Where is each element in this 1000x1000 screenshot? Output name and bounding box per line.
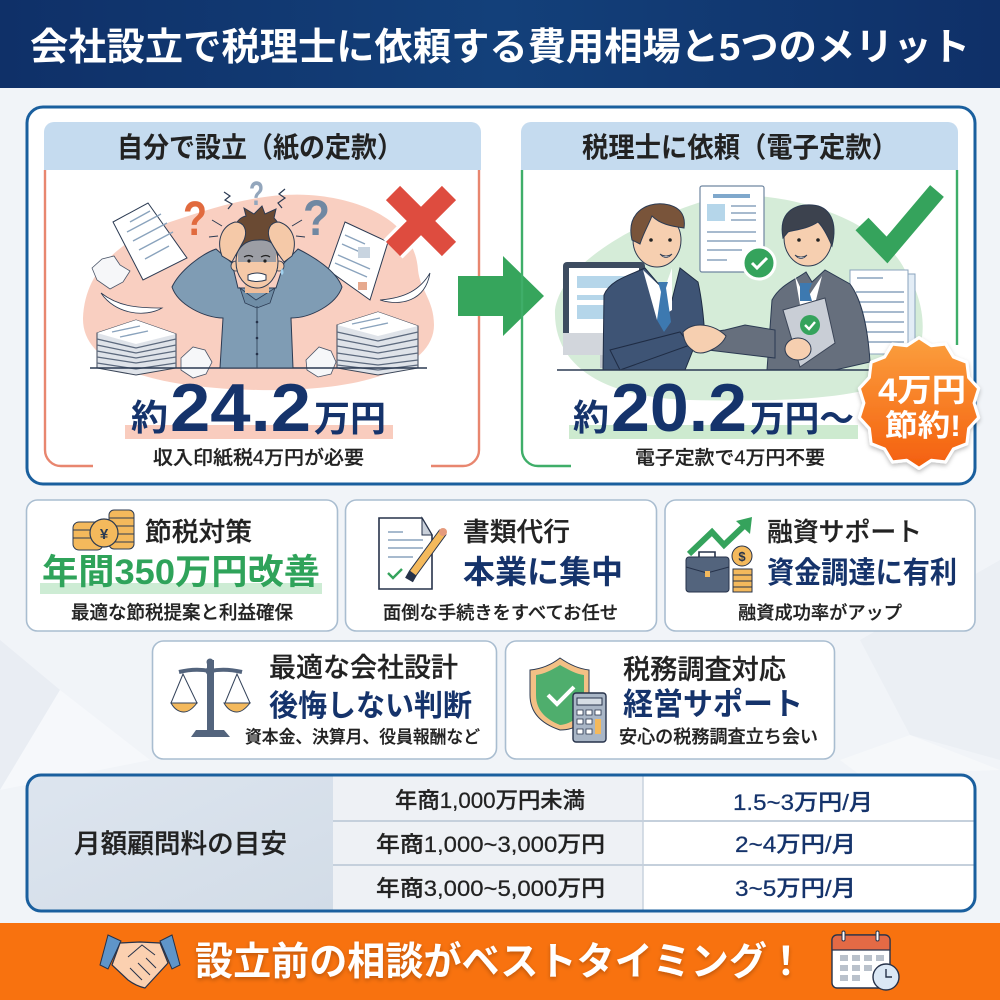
highlight: no regrets: 後悔しない判断 bbox=[269, 690, 472, 723]
caption: company design: 資本金、決算月、役員報酬など bbox=[245, 727, 480, 747]
table heading: 月額顧問料の目安 bbox=[74, 829, 287, 859]
highlight: management support: 経営サポート bbox=[623, 687, 803, 722]
card: tax saving bbox=[26, 500, 338, 631]
card: tax audit bbox=[506, 641, 834, 759]
table: monthly fee guide bbox=[27, 775, 975, 911]
heading: self setup: 自分で設立（紙の定款） bbox=[117, 132, 403, 163]
icon: coins: ¥ bbox=[100, 526, 109, 543]
illustration: stressed man with papers: ? bbox=[303, 190, 330, 246]
price: self setup: 約 bbox=[131, 397, 168, 438]
panel: self setup bbox=[44, 122, 481, 469]
card: paperwork bbox=[346, 500, 656, 631]
row: under 10M bbox=[395, 788, 873, 815]
icon: document and pencil bbox=[379, 518, 447, 589]
badge: 4万円節約 bbox=[859, 338, 979, 468]
icon: shield and calculator bbox=[530, 658, 606, 742]
heading: tax audit: 税務調査対応 bbox=[623, 655, 786, 685]
row: 10M to 30M: 年商1,000~3,000万円 bbox=[376, 832, 605, 857]
note: tax accountant: 電子定款で4万円不要 bbox=[635, 447, 825, 469]
heading: paperwork: 書類代行 bbox=[463, 517, 570, 547]
caption: tax saving: 最適な節税提案と利益確保 bbox=[71, 602, 293, 623]
icon: red cross bbox=[393, 193, 449, 249]
price: self setup: 万円 bbox=[314, 398, 386, 439]
badge: 4万円節約: 節約! bbox=[885, 410, 961, 443]
icon: growth and briefcase: $ bbox=[738, 549, 746, 564]
icon: growth and briefcase bbox=[686, 517, 752, 592]
caption: paperwork: 面倒な手続きをすべてお任せ bbox=[383, 603, 618, 623]
illustration: stressed man with papers: ? bbox=[249, 175, 264, 213]
row: 10M to 30M bbox=[376, 832, 856, 857]
title banner: 会社設立で税理士に依頼する費用相場と5つのメリット bbox=[30, 27, 970, 69]
panel: tax accountant bbox=[521, 122, 958, 469]
icon: handshake bbox=[100, 935, 180, 988]
caption: financing: 融資成功率がアップ bbox=[738, 602, 902, 623]
row: under 10M: 年商1,000万円未満 bbox=[395, 788, 585, 813]
heading: financing: 融資サポート bbox=[767, 517, 922, 547]
illustration: stressed man with papers bbox=[83, 175, 434, 390]
icon: calendar bbox=[832, 931, 899, 990]
icon: scales bbox=[171, 658, 250, 737]
title banner bbox=[0, 0, 1000, 88]
price: tax accountant: 万円〜 bbox=[750, 398, 854, 439]
price: tax accountant: 約 bbox=[573, 397, 609, 438]
card: financing bbox=[665, 500, 975, 631]
illustration: handshake bbox=[555, 186, 923, 401]
caption: tax audit: 安心の税務調査立ち会い bbox=[619, 727, 818, 747]
highlight: 350万円: 年間350万円改善 bbox=[42, 553, 320, 592]
icon: green check badge bbox=[743, 247, 775, 279]
heading: tax saving: 節税対策 bbox=[145, 517, 252, 547]
price: tax accountant bbox=[569, 370, 858, 446]
row: 30M to 50M: 3~5万円/月 bbox=[735, 876, 856, 901]
card: company design bbox=[152, 641, 496, 759]
price: tax accountant: 20.2 bbox=[611, 370, 747, 446]
heading: company design: 最適な会社設計 bbox=[269, 653, 458, 683]
icon: green check mark bbox=[862, 191, 937, 250]
footer banner bbox=[0, 923, 1000, 1000]
highlight: funding advantage: 資金調達に有利 bbox=[767, 557, 957, 590]
heading: tax accountant: 税理士に依頼（電子定款） bbox=[582, 132, 898, 163]
note: self setup: 収入印紙税4万円が必要 bbox=[153, 447, 364, 469]
price: self setup bbox=[125, 370, 393, 446]
price: self setup: 24.2 bbox=[170, 370, 311, 446]
illustration: stressed man with papers: ? bbox=[183, 193, 207, 246]
row: 10M to 30M: 2~4万円/月 bbox=[735, 832, 856, 857]
badge: 4万円節約: 4万円 bbox=[878, 372, 966, 408]
row: 30M to 50M bbox=[376, 876, 856, 901]
row: under 10M: 1.5~3万円/月 bbox=[733, 790, 873, 815]
highlight: focus on business: 本業に集中 bbox=[463, 554, 623, 590]
closing message: 設立前の相談がベストタイミング！ bbox=[195, 941, 805, 984]
row: 30M to 50M: 年商3,000~5,000万円 bbox=[376, 876, 605, 901]
arrow: to tax accountant bbox=[458, 256, 544, 336]
icon: coins bbox=[73, 510, 134, 550]
